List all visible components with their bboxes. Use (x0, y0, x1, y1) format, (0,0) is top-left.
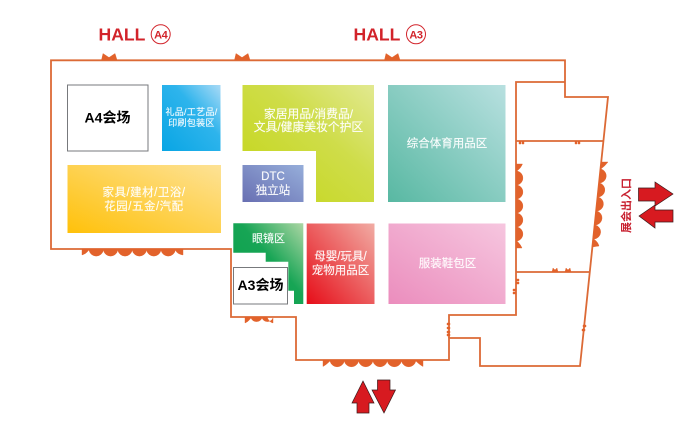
floor plan outline (51, 60, 608, 366)
heading: HALL A4: A4 (154, 29, 169, 41)
heading: HALL A3 (354, 25, 426, 45)
arrow: bottom entrance (352, 381, 374, 413)
panel: clothing, shoes and bags (388, 224, 506, 304)
panel: home and consumer goods: 文具/健康美妆个护区 (254, 120, 363, 134)
panel: A3 venue (234, 268, 288, 304)
entrance markers: small doors (447, 141, 586, 336)
panel: clothing, shoes and bags: 服装鞋包区 (419, 256, 476, 270)
panel: sports goods: 综合体育用品区 (407, 136, 487, 150)
panel: baby, toys and pets (307, 224, 374, 304)
heading: HALL A4 (98, 25, 170, 45)
panel: gifts and printing: 礼品/工艺品/ (165, 106, 218, 117)
panel: sports goods (388, 85, 506, 202)
panel: DTC (242, 165, 304, 202)
panel: DTC: 独立站 (256, 183, 291, 197)
panel: baby, toys and pets: 宠物用品区 (312, 263, 369, 277)
panel: furniture and building materials (68, 165, 221, 233)
arrow: right exit (639, 205, 673, 228)
panel: baby, toys and pets: 母婴/玩具/ (314, 250, 367, 263)
heading: HALL A3: A3 (409, 29, 423, 41)
arrow: right entrance (638, 182, 673, 206)
panel: A4 venue (68, 85, 148, 151)
panel: A3 venue: A3会场 (238, 277, 283, 293)
label: exhibition entrance and exit: 展会出入口 (619, 178, 633, 233)
heading: HALL A3: HALL (354, 25, 401, 45)
heading: HALL A4: HALL (98, 25, 146, 45)
panel: gifts and printing: 印刷包装区 (168, 117, 215, 128)
panel: furniture and building materials: 花园/五金/汽配 (104, 199, 184, 213)
panel: gifts and printing (162, 85, 220, 151)
panel: eyewear (233, 223, 303, 304)
panel: home and consumer goods: 家居用品/消费品/ (264, 107, 354, 121)
entrance markers: top doors (102, 54, 400, 60)
panel: eyewear: 眼镜区 (252, 231, 285, 245)
entrance markers: scalloped doors (82, 162, 608, 367)
panel: DTC: DTC (261, 171, 285, 183)
panel: home and consumer goods (242, 85, 374, 202)
panel: furniture and building materials: 家具/建材/卫浴/ (102, 185, 186, 199)
panel: A4 venue: A4会场 (85, 110, 130, 126)
arrow: bottom exit (372, 380, 396, 413)
